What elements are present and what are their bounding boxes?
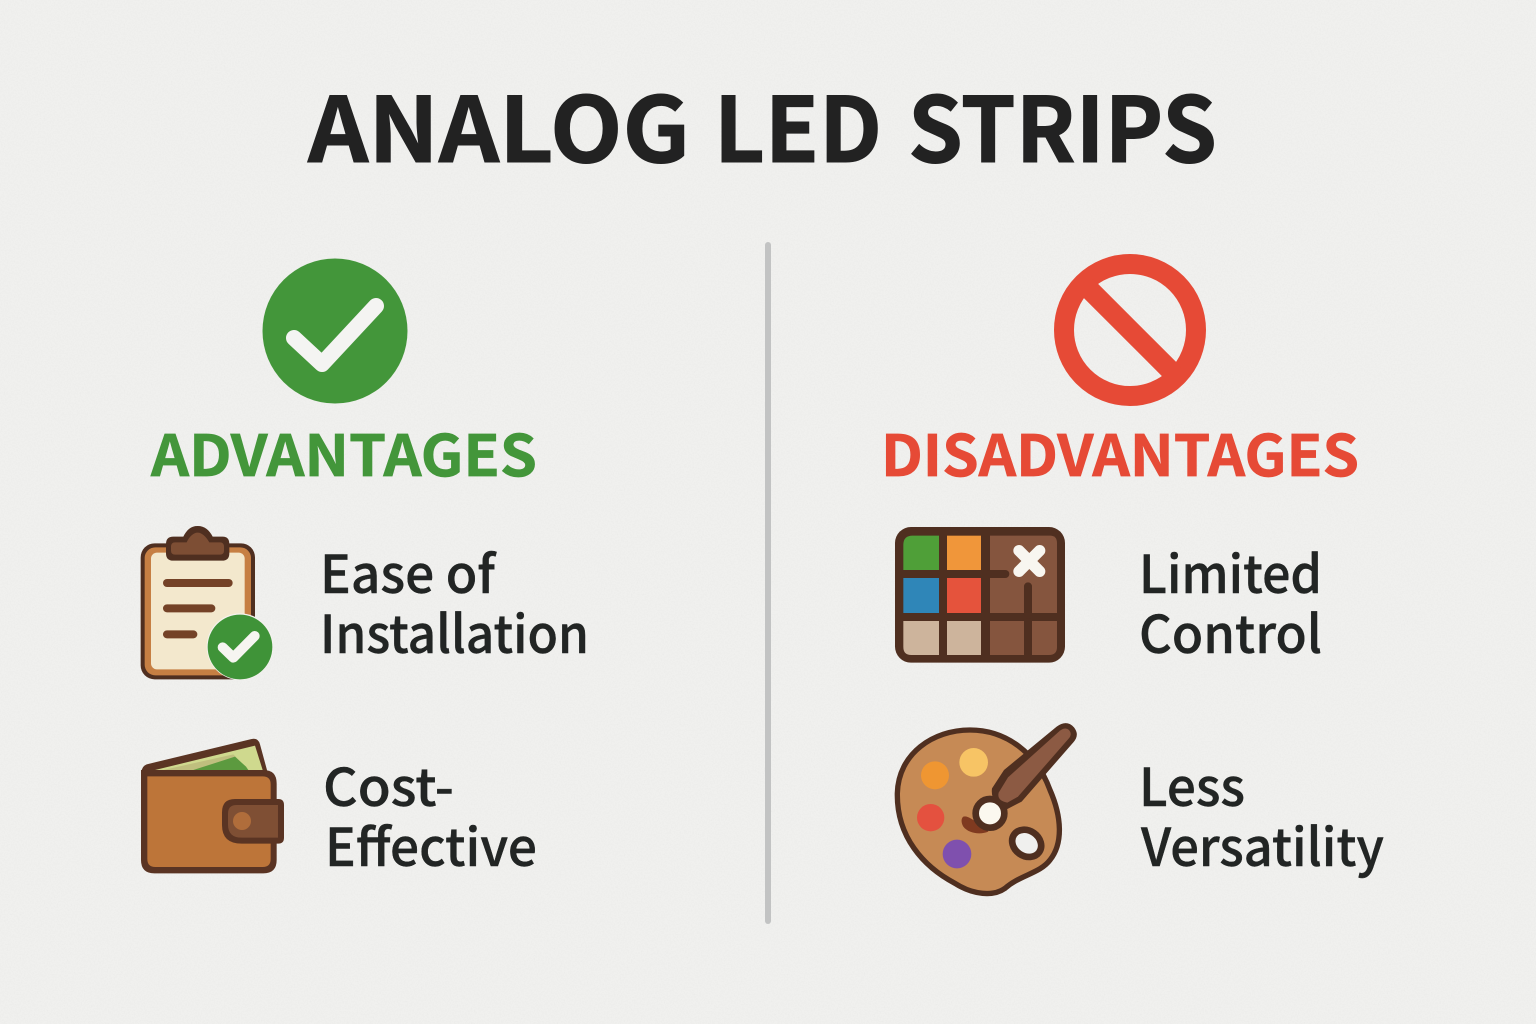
label: limited control: Control (1139, 593, 1322, 668)
icon: wallet (141, 739, 284, 873)
label: cost-effective: Effective (325, 806, 537, 881)
item: cost-effective (141, 739, 537, 881)
label: less versatility: Versatility (1140, 806, 1384, 881)
icon: colour grid with cross (895, 527, 1065, 663)
label: cost-effective: Cost- (323, 746, 454, 821)
icon: paint palette with brush (897, 723, 1077, 894)
label: limited control: Limited (1139, 533, 1322, 608)
label: ease of installation: Ease of (320, 533, 497, 608)
item: limited control (895, 527, 1322, 668)
title: LED (714, 58, 882, 188)
item: ease of installation (141, 526, 589, 680)
center divider (765, 242, 771, 924)
icon: clipboard with check (141, 526, 273, 680)
label: less versatility: Less (1139, 746, 1245, 821)
icon: green check circle (262, 258, 408, 404)
title: ANALOG (307, 58, 690, 188)
title: STRIPS (908, 58, 1217, 188)
icon: red prohibition sign (1064, 264, 1196, 396)
heading: advantages: ADVANTAGES (150, 411, 537, 493)
item: less versatility (897, 723, 1384, 894)
panel: advantages (141, 258, 589, 881)
label: ease of installation: Installation (320, 593, 589, 668)
panel: disadvantages (881, 264, 1384, 894)
heading: disadvantages: DISADVANTAGES (881, 411, 1359, 493)
